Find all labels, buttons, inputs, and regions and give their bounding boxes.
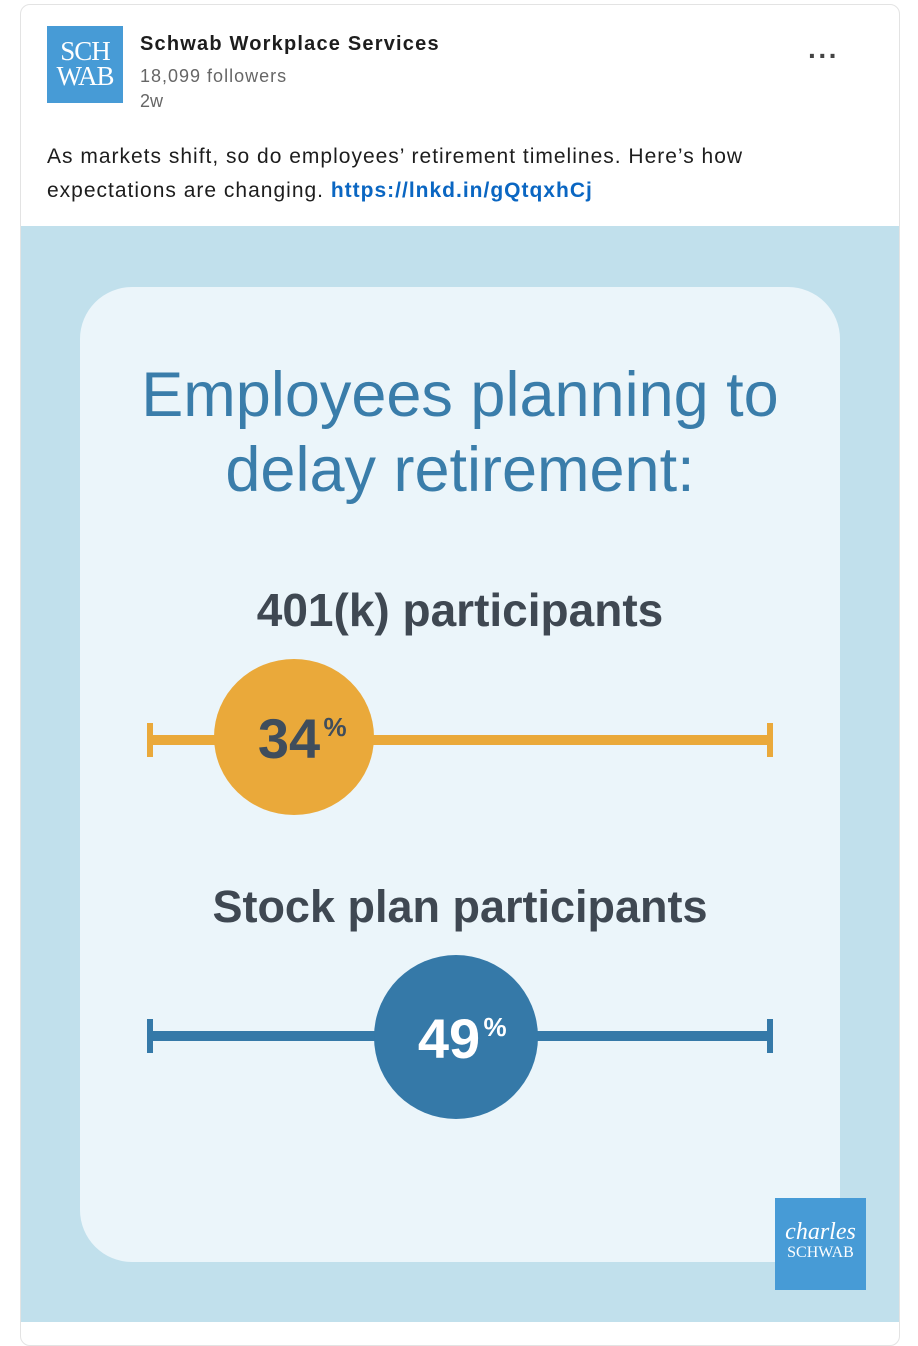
logo: SCHWAB: SCH [60,36,110,66]
time: 2w [140,91,163,111]
menu dots: ··· [808,40,839,71]
chart: stock plan 49% [147,955,773,1119]
logo: charles schwab: charles [785,1219,856,1245]
chart: 401k 34% [147,659,773,815]
title: delay retirement: [225,435,695,505]
company name: Schwab Workplace Services [140,33,440,55]
chart: stock plan 49%: 49 [418,1007,480,1070]
logo: SCHWAB [47,26,123,103]
followers: 18,099 followers [140,66,287,86]
infographic background [21,226,899,1322]
chart: stock plan 49%: % [483,1012,507,1042]
heading: 401(k) participants: 401(k) participants [257,584,663,636]
logo: SCHWAB: WAB [56,61,114,91]
post text: As markets shift, so do employees’ retirement timelines. Here’s how [47,145,743,168]
logo: charles schwab [775,1198,866,1290]
title: Employees planning to [141,360,779,430]
post text [47,145,743,202]
chart: 401k 34%: % [323,712,347,742]
title [141,360,779,505]
post text: expectations are changing. https://lnkd.in/gQtqxhCj [47,179,593,202]
inner panel [80,287,840,1262]
chart: 401k 34%: 34 [258,707,320,770]
logo: charles schwab: SCHWAB [787,1244,854,1261]
heading: Stock plan participants: Stock plan participants [212,881,708,932]
